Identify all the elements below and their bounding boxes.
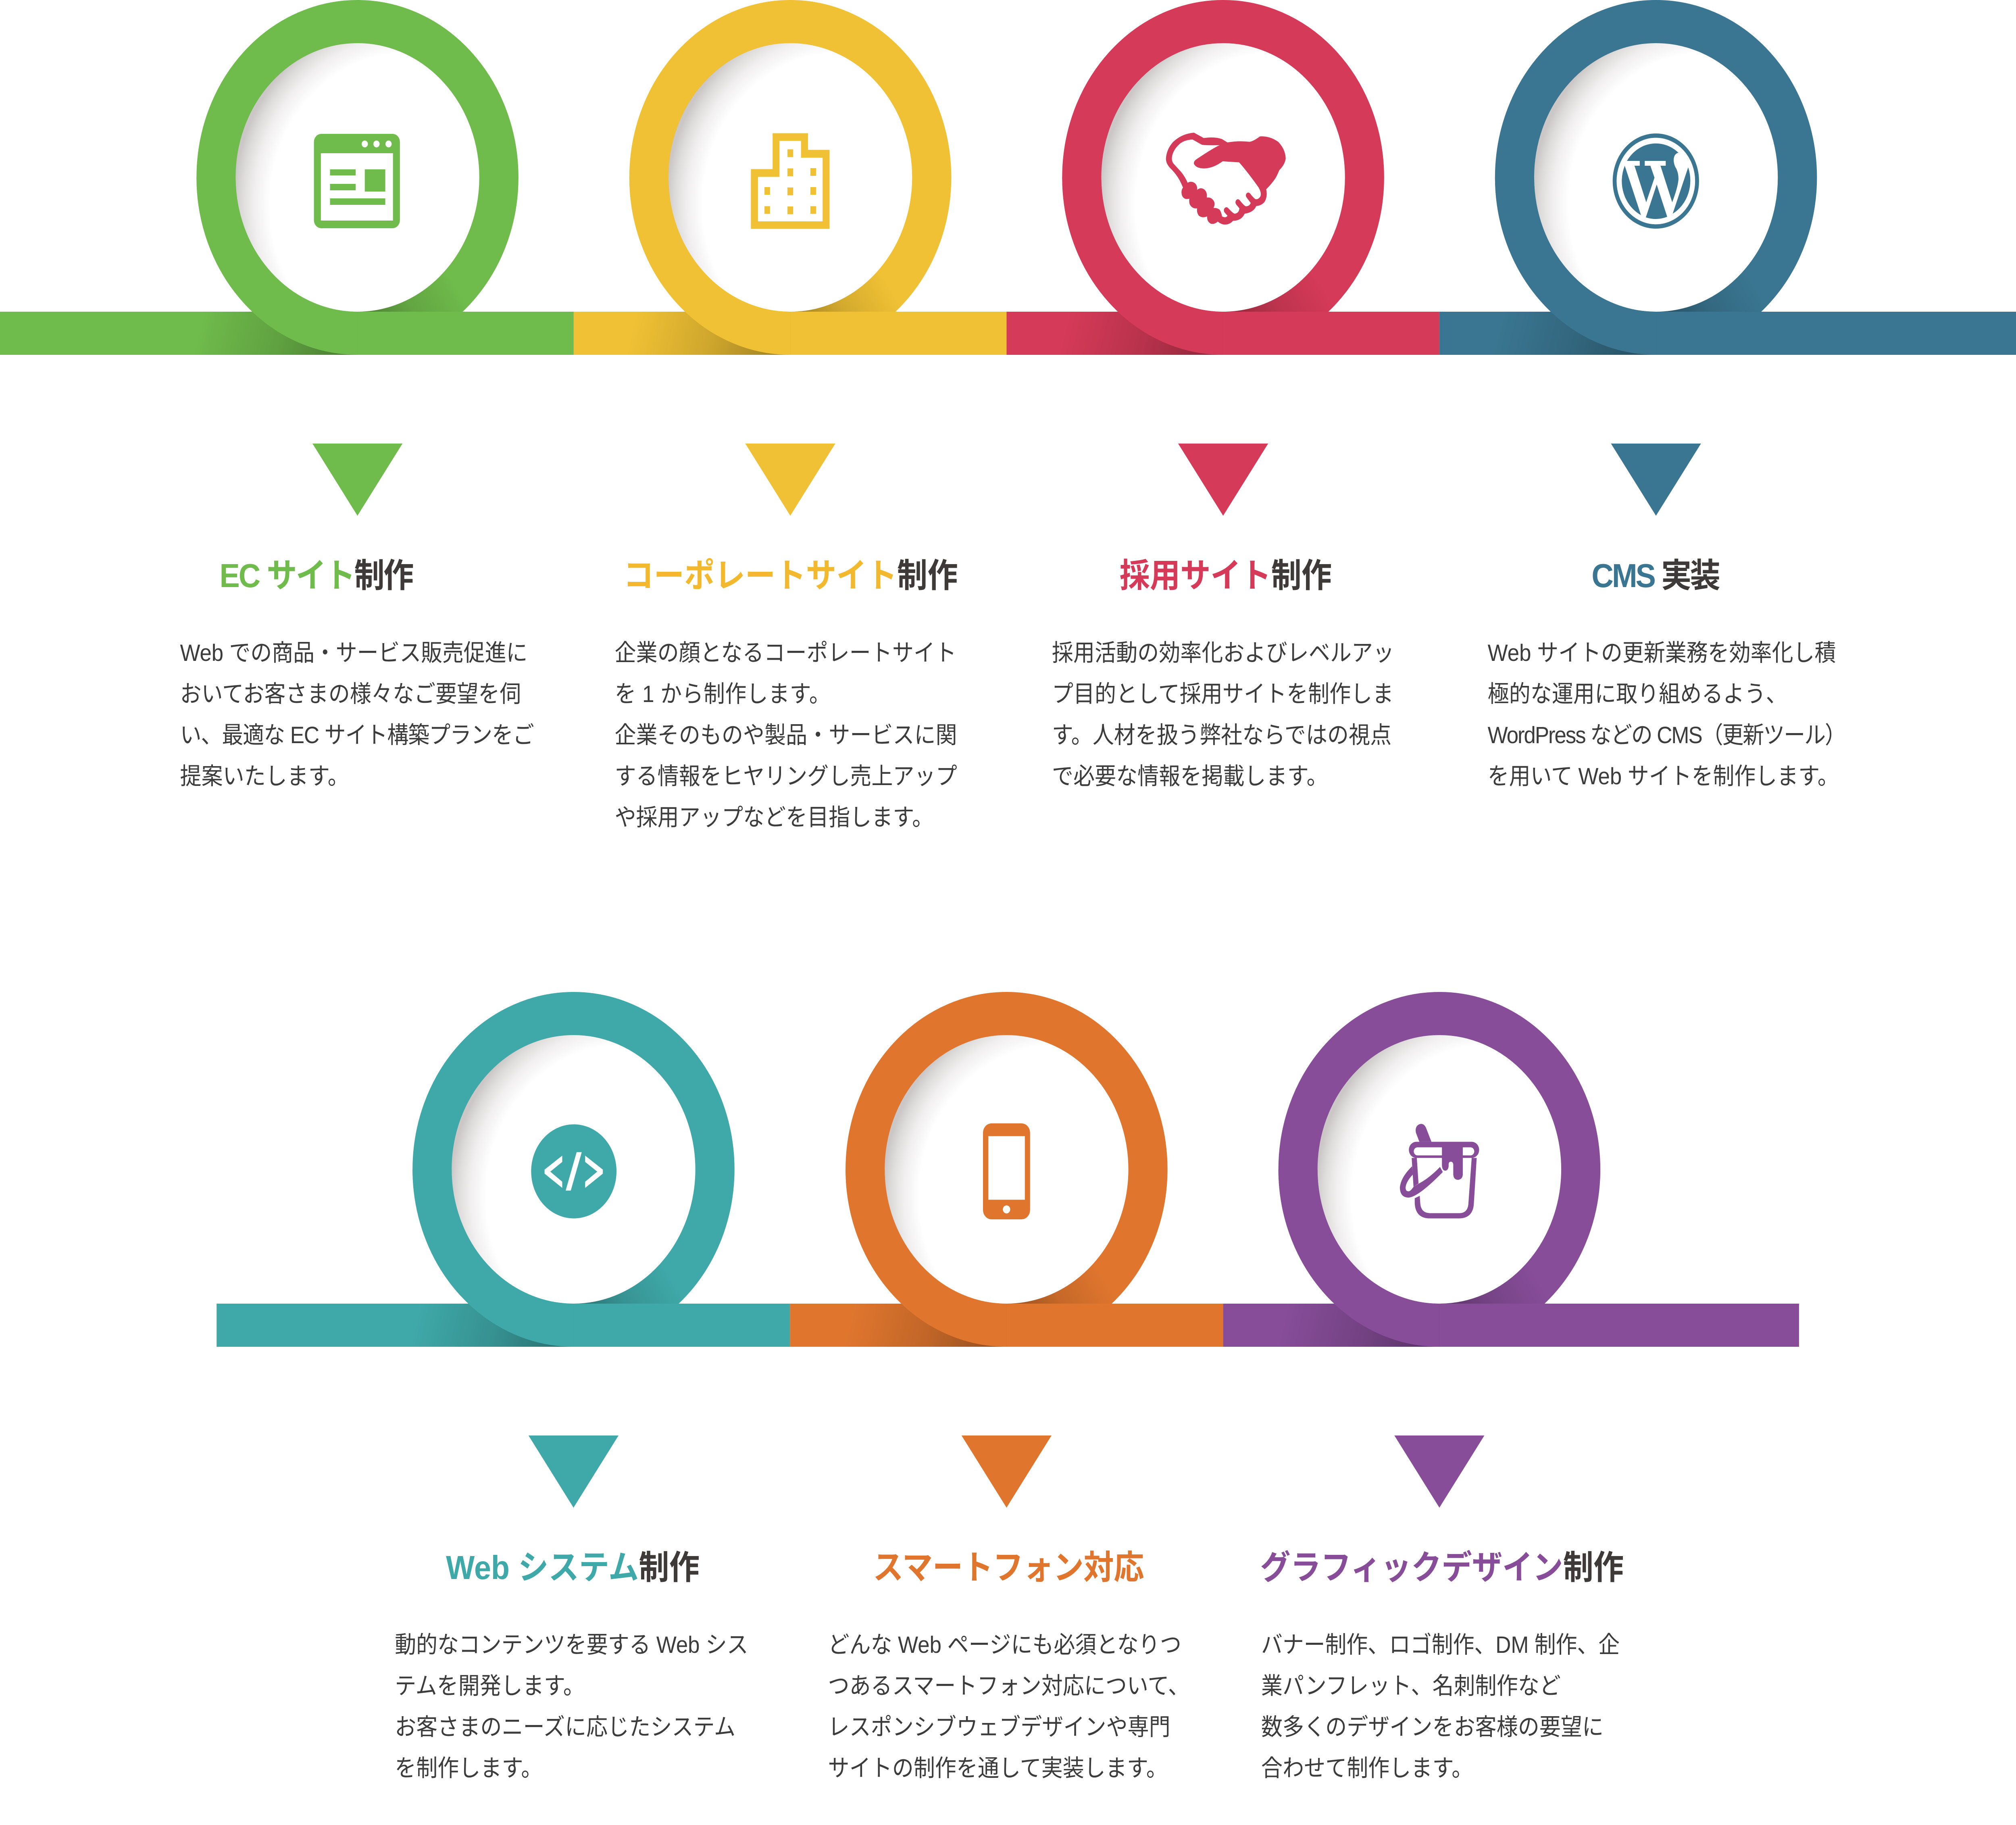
- text block: graphic design: 合わせて制作します。: [1261, 1755, 1473, 1781]
- text block: graphic design: [1261, 1631, 1620, 1781]
- text block: corporate site: [615, 640, 957, 831]
- text block: EC site: 提案いたします。: [180, 763, 349, 790]
- arrow: down triangle: [312, 444, 402, 516]
- text block: EC site: おいてお客さまの様々なご要望を伺: [180, 681, 521, 707]
- panel: EC site: [0, 22, 574, 790]
- ribbon ring: yellow: [574, 22, 1006, 355]
- text block: recruiting site: す。人材を扱う弊社ならではの視点: [1052, 722, 1391, 748]
- arrow: down triangle: [745, 444, 835, 516]
- text block: web system: テムを開発します。: [395, 1673, 585, 1699]
- text block: corporate site: する情報をヒヤリングし売上アップ: [615, 763, 957, 790]
- heading: EC site: EC サイト制作: [219, 557, 414, 594]
- icon: building: [751, 133, 829, 229]
- panel: web system: [217, 1014, 790, 1781]
- heading: recruiting site: 採用サイト制作: [1120, 557, 1332, 594]
- text block: EC site: [180, 640, 534, 790]
- panel: corporate site: [574, 22, 1006, 831]
- text block: recruiting site: で必要な情報を掲載します。: [1052, 763, 1328, 790]
- icon: handshake: [1166, 133, 1286, 225]
- ribbon ring: slate blue: [1439, 22, 2016, 355]
- text block: CMS: を用いて Web サイトを制作します。: [1488, 763, 1839, 790]
- text block: smartphone: どんな Web ページにも必須となりつ: [828, 1631, 1181, 1658]
- text block: recruiting site: [1052, 640, 1394, 790]
- text block: corporate site: 企業の顔となるコーポレートサイト: [615, 640, 956, 666]
- text block: CMS: WordPress などの CMS（更新ツール）: [1488, 722, 1846, 748]
- ribbon ring: teal: [217, 1014, 790, 1347]
- ribbon ring: orange: [790, 1014, 1223, 1347]
- text block: EC site: Web での商品・サービス販売促進に: [180, 640, 528, 666]
- icon: smartphone: [983, 1123, 1030, 1219]
- text block: graphic design: 業パンフレット、名刺制作など: [1261, 1673, 1561, 1699]
- arrow: down triangle: [962, 1435, 1052, 1508]
- ribbon ring: green: [0, 22, 574, 355]
- panel: CMS: [1439, 22, 2016, 790]
- icon: code brackets: [531, 1124, 616, 1219]
- text block: graphic design: バナー制作、ロゴ制作、DM 制作、企: [1261, 1631, 1620, 1658]
- text block: corporate site: や採用アップなどを目指します。: [615, 804, 933, 831]
- text block: web system: 動的なコンテンツを要する Web シス: [395, 1631, 748, 1658]
- text block: web system: を制作します。: [395, 1755, 542, 1781]
- text block: smartphone: レスポンシブウェブデザインや専門: [828, 1714, 1170, 1740]
- text block: smartphone: つあるスマートフォン対応について、: [828, 1673, 1189, 1699]
- text block: corporate site: を 1 から制作します。: [615, 681, 831, 707]
- panel: smartphone: [790, 1014, 1223, 1781]
- text block: graphic design: 数多くのデザインをお客様の要望に: [1261, 1714, 1604, 1740]
- panel: recruiting site: [1006, 22, 1439, 790]
- arrow: down triangle: [1611, 444, 1701, 516]
- arrow: down triangle: [1394, 1435, 1484, 1508]
- heading: CMS: CMS 実装: [1591, 557, 1720, 594]
- icon: paint bucket: [1400, 1124, 1479, 1219]
- text block: web system: [395, 1631, 748, 1781]
- text block: recruiting site: プ目的として採用サイトを制作しま: [1052, 681, 1393, 707]
- text block: recruiting site: 採用活動の効率化およびレベルアッ: [1052, 640, 1394, 666]
- heading: graphic design: グラフィックデザイン制作: [1260, 1549, 1624, 1586]
- ribbon ring: crimson: [1006, 22, 1439, 355]
- arrow: down triangle: [1178, 444, 1268, 516]
- panel: graphic design: [1223, 1014, 1799, 1781]
- heading: corporate site: コーポレートサイト制作: [623, 557, 958, 594]
- arrow: down triangle: [529, 1435, 619, 1508]
- text block: smartphone: [828, 1631, 1189, 1781]
- text block: web system: お客さまのニーズに応じたシステム: [395, 1714, 735, 1740]
- heading: web system: Web システム制作: [446, 1549, 700, 1586]
- text block: CMS: Web サイトの更新業務を効率化し積: [1488, 640, 1836, 666]
- text block: smartphone: サイトの制作を通して実装します。: [828, 1755, 1168, 1781]
- text block: EC site: い、最適な EC サイト構築プランをご: [180, 722, 534, 748]
- icon: WordPress logo: [1615, 135, 1697, 227]
- text block: CMS: 極的な運用に取り組めるよう、: [1488, 681, 1787, 707]
- text block: CMS: [1488, 640, 1846, 790]
- heading: smartphone: スマートフォン対応: [873, 1549, 1144, 1586]
- ribbon ring: purple: [1223, 1014, 1799, 1347]
- text block: corporate site: 企業そのものや製品・サービスに関: [615, 722, 957, 748]
- icon: browser window: [314, 134, 400, 228]
